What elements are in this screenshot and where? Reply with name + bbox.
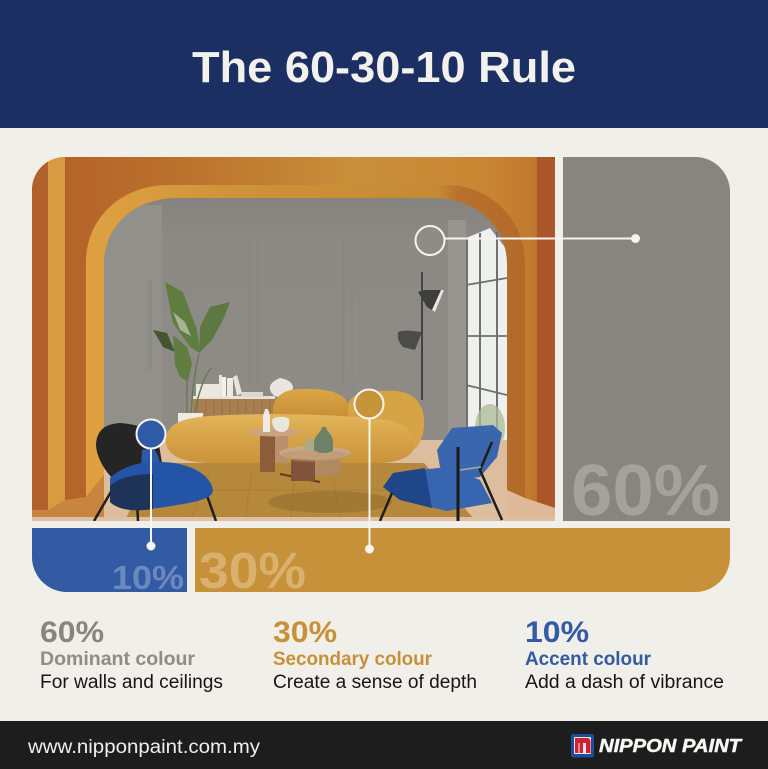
panel: 30 percent swatch (195, 528, 730, 599)
window pier (448, 220, 466, 435)
header band (0, 0, 768, 128)
callout: gold sofa marker (354, 390, 384, 554)
coffee tables (248, 428, 351, 482)
rug (125, 463, 476, 521)
window (466, 228, 507, 452)
sofa (166, 389, 424, 463)
right floor wedge (507, 490, 555, 517)
panel: 60 percent swatch (563, 157, 730, 531)
big 10%: 10% (112, 559, 184, 596)
icon: Nippon Paint logo mark (571, 734, 594, 758)
text block: accent colour: Add a dash of vibrance (525, 672, 724, 693)
text block: secondary colour (273, 616, 477, 693)
big 30%: 30% (199, 542, 306, 599)
left wood floor wedge (32, 475, 104, 521)
text block: dominant colour: 60% (40, 616, 104, 649)
orange arch wall (32, 157, 555, 521)
floor (104, 440, 507, 521)
text block: dominant colour (40, 616, 223, 693)
text block: accent colour: Accent colour (525, 649, 652, 670)
text block: dominant colour: Dominant colour (40, 649, 196, 670)
callout: grey wall marker (416, 226, 640, 255)
room interior (104, 198, 507, 521)
text block: accent colour: 10% (525, 616, 589, 649)
page background (0, 128, 768, 721)
logo wordmark: NIPPON PAINT (599, 736, 743, 756)
panel: room illustration (32, 157, 555, 521)
vases (263, 409, 333, 453)
plant (153, 282, 230, 415)
white vase (270, 378, 293, 397)
callout: blue chair marker (136, 420, 166, 550)
panel: 10 percent swatch (32, 528, 187, 596)
text block: secondary colour: Secondary colour (273, 649, 433, 670)
plant pot (178, 413, 203, 423)
text block: secondary colour: 30% (273, 616, 337, 649)
arch reveal (86, 185, 525, 521)
books (196, 375, 263, 397)
floor lamp (398, 272, 444, 400)
big 60%: 60% (571, 451, 720, 531)
footer band (0, 721, 768, 769)
left chair (94, 423, 216, 521)
text block: secondary colour: Create a sense of depth (273, 672, 477, 693)
text block: accent colour (525, 616, 724, 693)
floor edge strip (32, 517, 555, 521)
sideboard (193, 396, 275, 416)
right chair (380, 425, 502, 521)
website: www.nipponpaint.com.my (27, 737, 261, 758)
grey wall (104, 198, 507, 440)
title: The 60-30-10 Rule (192, 43, 576, 92)
text block: dominant colour: For walls and ceilings (40, 672, 223, 693)
